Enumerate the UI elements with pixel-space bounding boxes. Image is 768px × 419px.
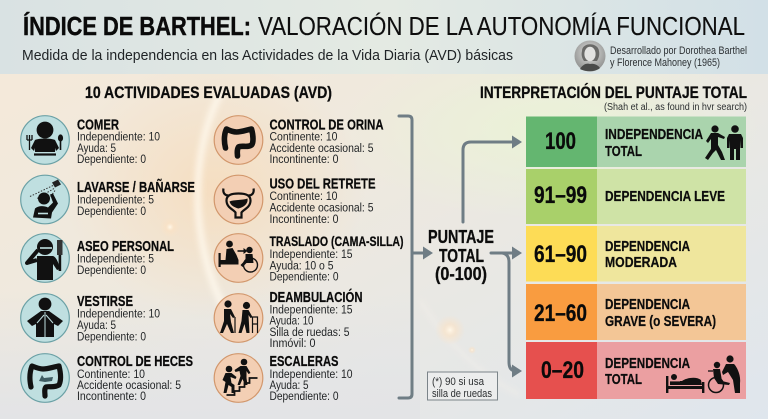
score row: 91-99 — [526, 169, 746, 224]
icon: dressing — [21, 294, 69, 342]
icon: person eating — [21, 116, 69, 164]
arrow: activities to total — [413, 246, 433, 260]
text: escaleras: Ayuda: 5 — [270, 378, 309, 392]
score row: 0-20: TOTAL — [605, 372, 642, 388]
icon: walking with aids — [214, 294, 263, 342]
text: traslado: TRASLADO (CAMA-SILLA) — [270, 234, 404, 249]
text: control de heces: CONTROL DE HECES — [77, 354, 193, 370]
text: deambulación — [270, 288, 362, 350]
activity: escaleras — [214, 354, 353, 403]
activity: vestirse — [21, 294, 160, 344]
text: escaleras — [270, 354, 353, 403]
title: ÍNDICE DE BARTHEL: — [23, 12, 251, 41]
text: uso del retrete: Incontinente: 0 — [270, 212, 339, 226]
text: vestirse: VESTIRSE — [77, 294, 133, 310]
score row: 100: TOTAL — [605, 144, 642, 160]
text: deambulación: Ayuda: 10 — [270, 314, 314, 328]
score row: 0-20 — [526, 342, 746, 399]
text: escaleras: Dependiente: 0 — [270, 389, 339, 403]
heading: interpretation: (Shah et al., as found in hvr search) — [604, 102, 747, 113]
score row: 91-99: 91–99 — [534, 182, 587, 209]
text: lavarse: LAVARSE / BAÑARSE — [77, 178, 195, 196]
activity: control de heces — [21, 354, 193, 403]
score row: 61-90: MODERADA — [605, 255, 677, 271]
activity: comer — [21, 116, 160, 166]
total score label: PUNTAJE — [428, 226, 494, 247]
text: deambulación: DEAMBULACIÓN — [270, 288, 362, 306]
score row: 100: 100 — [545, 128, 576, 155]
text: control de orina: CONTROL DE ORINA — [270, 118, 384, 134]
footnote box: silla de ruedas — [432, 388, 493, 400]
text: traslado: Ayuda: 10 o 5 — [270, 258, 334, 272]
icon: bladder — [214, 175, 263, 224]
text: aseo personal: Independiente: 5 — [77, 252, 154, 266]
developer credit: Desarrollado por Dorothea Barthel — [610, 45, 747, 57]
activity: lavarse — [21, 175, 195, 224]
score row: 21-60 — [526, 284, 746, 340]
text: deambulación: Independiente: 15 — [270, 302, 353, 316]
total score label: (0-100) — [435, 264, 487, 284]
score row: 100: INDEPENDENCIA — [605, 127, 703, 143]
icon: two people — [705, 125, 743, 160]
text: control de heces: Continente: 10 — [77, 367, 145, 381]
text: control de heces: Incontinente: 0 — [77, 389, 146, 403]
text: uso del retrete: USO DEL RETRETE — [270, 176, 376, 192]
text: control de heces — [77, 354, 193, 403]
icon: bed to wheelchair transfer — [214, 234, 263, 282]
text: comer: Ayuda: 5 — [77, 141, 116, 155]
text: comer — [77, 118, 160, 166]
text: comer: COMER — [77, 118, 119, 134]
total score label — [428, 226, 494, 284]
bracket joining activities — [399, 116, 412, 398]
subtitle: Medida de la independencia en las Actividades de la Vida Diaria (AVD) básicas — [22, 48, 513, 64]
score row: 0-20: DEPENDENCIA — [605, 356, 690, 372]
score row: 21-60: GRAVE (o SEVERA) — [605, 314, 716, 330]
text: comer: Independiente: 10 — [77, 130, 160, 144]
text: lavarse — [77, 178, 195, 218]
portrait: Dorothea Barthel — [574, 40, 606, 72]
text: control de heces: Accidente ocasional: 5 — [77, 378, 181, 392]
text: aseo personal — [77, 239, 174, 277]
text: comer: Dependiente: 0 — [77, 152, 146, 166]
text: aseo personal: Dependiente: 0 — [77, 263, 146, 277]
score row: 21-60: DEPENDENCIA — [605, 297, 690, 313]
score row: 61-90: DEPENDENCIA — [605, 239, 690, 255]
score row: 100 — [526, 116, 746, 167]
total score label: TOTAL — [439, 245, 484, 266]
developer credit — [610, 45, 747, 69]
arrow: total down to total dependence — [502, 253, 522, 378]
score row: 61-90: 61–90 — [534, 241, 587, 268]
text: uso del retrete — [270, 176, 376, 226]
text: escaleras: ESCALERAS — [270, 354, 339, 370]
text: vestirse: Ayuda: 5 — [77, 318, 116, 332]
footnote box: (*) 90 si usa — [432, 376, 484, 388]
text: traslado: Independiente: 15 — [270, 247, 353, 261]
activity: traslado — [214, 234, 404, 283]
icon: person in bed and wheelchair with carer — [666, 355, 740, 393]
header band — [0, 0, 768, 74]
activity: deambulación — [214, 288, 362, 350]
developer credit: y Florence Mahoney (1965) — [610, 57, 720, 69]
text: control de orina — [270, 118, 384, 166]
text: uso del retrete: Accidente ocasional: 5 — [270, 200, 374, 214]
heading: interpretation — [480, 83, 747, 113]
score row: 91-99: DEPENDENCIA LEVE — [605, 189, 725, 205]
text: control de orina: Continente: 10 — [270, 130, 338, 144]
icon: grooming — [21, 234, 69, 282]
title — [23, 12, 745, 41]
text: control de orina: Incontinente: 0 — [270, 152, 339, 166]
arrow: total to moderate — [491, 246, 522, 260]
text: escaleras: Independiente: 10 — [270, 367, 353, 381]
text: aseo personal: ASEO PERSONAL — [77, 239, 174, 255]
arrow: total up to independence — [463, 136, 522, 222]
text: vestirse: Independiente: 10 — [77, 306, 160, 320]
icon: intestine — [214, 116, 263, 164]
score row: 21-60: 21–60 — [534, 300, 587, 327]
score row: 61-90 — [526, 226, 746, 282]
footnote box — [428, 372, 498, 400]
icon: bowel — [21, 354, 69, 402]
icon: stairs — [214, 354, 263, 402]
text: uso del retrete: Continente: 10 — [270, 189, 338, 203]
activity: uso del retrete — [214, 175, 376, 226]
icon: shower — [21, 175, 69, 224]
activity: aseo personal — [21, 234, 174, 282]
text: vestirse: Dependiente: 0 — [77, 330, 146, 344]
text: traslado — [270, 234, 404, 283]
text: vestirse — [77, 294, 160, 344]
text: deambulación: Inmóvil: 0 — [270, 336, 316, 350]
text: traslado: Dependiente: 0 — [270, 269, 339, 283]
heading: activities: 10 ACTIVIDADES EVALUADAS (AVD) — [85, 83, 332, 102]
score row: 0-20: 0–20 — [541, 357, 584, 384]
activity: control de orina — [214, 116, 384, 166]
text: deambulación: Silla de ruedas: 5 — [270, 325, 350, 339]
text: control de orina: Accidente ocasional: 5 — [270, 141, 374, 155]
text: lavarse: Independiente: 5 — [77, 192, 154, 206]
text: lavarse: Dependiente: 0 — [77, 204, 146, 218]
